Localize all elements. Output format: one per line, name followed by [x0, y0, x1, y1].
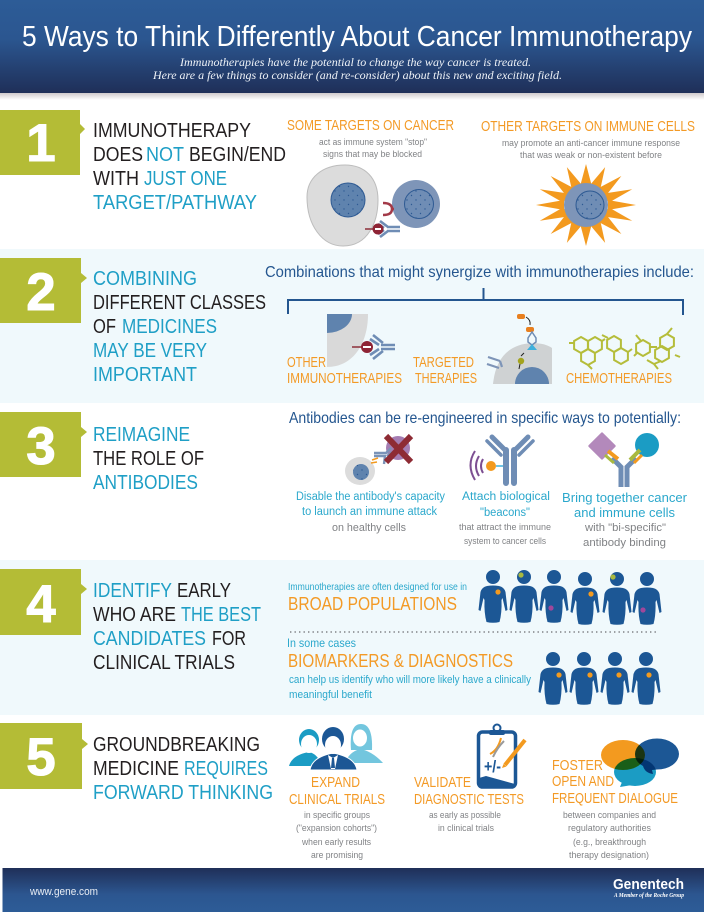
footer [2, 868, 704, 912]
heading 4: CLINICAL TRIALS [93, 652, 235, 674]
heading 2: DIFFERENT CLASSES [93, 292, 266, 314]
text: foster open dialogue [552, 758, 678, 861]
text: some targets on cancer: signs that may be blocked [323, 149, 422, 160]
heading 1: DOES [93, 144, 143, 166]
text: expand clinical trials: ("expansion cohorts") [296, 823, 377, 834]
text: attach biological beacons: Attach biological [462, 491, 550, 503]
number badge 2: 2 [26, 263, 56, 322]
heading 5 [93, 734, 273, 804]
text: foster open dialogue: between companies and [563, 810, 656, 821]
icon: targeted therapy [487, 314, 552, 384]
text: bring together [562, 490, 688, 549]
people: selected population [538, 652, 660, 705]
icon: activated immune cell [536, 164, 636, 246]
icon: clipboard with DNA and pencil [478, 724, 525, 787]
number badge 4: 4 [26, 575, 56, 634]
text: bring together: and immune cells [574, 505, 675, 520]
number badge 1 [0, 110, 85, 175]
people: broad population [478, 570, 662, 625]
panel: section 4 [0, 560, 704, 715]
bracket [288, 288, 683, 315]
heading 3: THE ROLE OF [93, 448, 204, 470]
heading 4: IDENTIFY [93, 580, 172, 602]
subtitle [152, 55, 562, 82]
text: some targets on cancer: act as immune system "stop" [319, 137, 427, 148]
text: bring together: Bring together cancer [562, 490, 688, 505]
heading 2 [93, 268, 266, 386]
text: validate diagnostic tests: DIAGNOSTIC TESTS [414, 792, 524, 808]
heading 2: IMPORTANT [93, 364, 197, 386]
heading 4: WHO ARE [93, 604, 176, 626]
heading 4: EARLY [177, 580, 231, 602]
number badge 1: 1 [26, 114, 56, 173]
label: other immunotherapies [287, 355, 402, 387]
text: foster open dialogue: therapy designation) [569, 850, 649, 861]
text: biomarkers and diagnostics [287, 636, 531, 701]
panel: section 1 [0, 110, 695, 246]
number badge 3 [0, 412, 87, 477]
text: validate diagnostic tests: as early as possible [429, 810, 501, 821]
heading 1: IMMUNOTHERAPY [93, 120, 251, 142]
heading 2: COMBINING [93, 268, 197, 290]
number badge 2 [0, 258, 87, 323]
text: foster open dialogue: FOSTER [552, 758, 603, 774]
text: expand clinical trials [289, 775, 385, 861]
number badge 3: 3 [26, 417, 56, 476]
label: other immunotherapies: OTHER [287, 355, 326, 371]
heading 4: THE BEST [181, 604, 261, 626]
text: broad populations [288, 581, 467, 614]
text: foster open dialogue: (e.g., breakthrough [573, 837, 646, 848]
heading 2: OF [93, 316, 116, 338]
logo: Genentech: Genentech [613, 876, 684, 893]
heading 5: MEDICINE [93, 758, 179, 780]
label: chemotherapies: CHEMOTHERAPIES [566, 371, 672, 387]
icon: disabled antibody [345, 436, 411, 485]
label: targeted therapies: TARGETED [413, 355, 474, 371]
text: bring together: antibody binding [583, 537, 666, 549]
text: some targets on cancer [287, 117, 454, 160]
icon: chemotherapy molecules [569, 328, 680, 369]
number badge 4 [0, 569, 87, 635]
text: biomarkers and diagnostics: In some cases [287, 636, 356, 650]
text: expand clinical trials: when early results [301, 837, 371, 848]
heading 1: NOT [146, 144, 184, 166]
text: broad populations: Immunotherapies are often designed for use in [288, 581, 467, 593]
text: biomarkers and diagnostics: BIOMARKERS & DIAGNOSTICS [288, 651, 513, 671]
website: www.gene.com [29, 886, 98, 898]
text: broad populations: BROAD POPULATIONS [288, 594, 457, 614]
text: disable the antibody: on healthy cells [332, 522, 406, 534]
heading 1 [93, 120, 286, 214]
text: biomarkers and diagnostics: meaningful benefit [289, 689, 372, 701]
icon: bi-specific antibody [588, 432, 659, 487]
panel: section 2 [0, 249, 704, 403]
icon: cancer cell with blocked checkpoint [307, 165, 440, 246]
label: targeted therapies: THERAPIES [415, 371, 477, 387]
text: disable the antibody: to launch an immune attack [302, 506, 437, 518]
heading 5: REQUIRES [184, 758, 268, 780]
text: attach biological beacons: that attract the immune [459, 522, 551, 533]
text: bring together: with "bi-specific" [584, 522, 666, 534]
text: foster open dialogue: OPEN AND [552, 774, 614, 790]
text: validate diagnostic tests: in clinical trials [438, 823, 494, 834]
icon: antibody with beacon [470, 437, 533, 483]
header banner [0, 0, 704, 100]
logo: Genentech: A Member of the Roche Group [613, 892, 685, 899]
subtitle: Immunotherapies have the potential to change the way cancer is treated. [179, 55, 531, 69]
label: other immunotherapies: IMMUNOTHERAPIES [287, 371, 402, 387]
heading 1: TARGET/PATHWAY [93, 192, 257, 214]
heading 1: BEGIN/END [189, 144, 286, 166]
text: biomarkers and diagnostics: can help us identify who will more likely have a clinically [289, 674, 531, 686]
heading 5: FORWARD THINKING [93, 782, 273, 804]
subtitle: Here are a few things to consider (and re-consider) about this new and exciting field. [152, 68, 562, 82]
heading 4 [93, 580, 261, 674]
heading 2: MAY BE VERY [93, 340, 207, 362]
text: attach biological beacons: system to cancer cells [464, 536, 546, 547]
text: other targets on immune cells: that was weak or non-existent before [520, 150, 662, 161]
icon: group of people [289, 724, 383, 770]
icon: clipboard with DNA and pencil: +/- [484, 757, 501, 776]
logo: Genentech [613, 876, 685, 899]
text: expand clinical trials: in specific groups [304, 810, 370, 821]
heading 1: JUST ONE [144, 168, 227, 190]
panel: section 3 [0, 410, 688, 549]
number badge 5 [0, 723, 88, 789]
text: attach biological beacons: "beacons" [480, 507, 530, 519]
text: other targets on immune cells: may promote an anti-cancer immune response [502, 138, 680, 149]
heading 3 [93, 424, 204, 494]
text: expand clinical trials: EXPAND [311, 775, 360, 791]
heading 5: GROUNDBREAKING [93, 734, 260, 756]
label: targeted therapies [413, 355, 477, 387]
heading 3: REIMAGINE [93, 424, 190, 446]
text: expand clinical trials: are promising [311, 850, 363, 861]
panel: section 5 [0, 723, 679, 861]
text: foster open dialogue: regulatory authorities [568, 823, 651, 834]
number badge 5: 5 [26, 728, 56, 787]
heading 2: MEDICINES [122, 316, 217, 338]
heading 1: WITH [93, 168, 139, 190]
text: other targets on immune cells [481, 118, 695, 161]
text: disable the antibody [296, 491, 445, 534]
text: some targets on cancer: SOME TARGETS ON CANCER [287, 117, 454, 134]
icon: other immunotherapies [327, 314, 395, 367]
text: disable the antibody: Disable the antibody's capacity [296, 491, 445, 503]
text: validate diagnostic tests: VALIDATE [414, 775, 471, 791]
heading 4: FOR [212, 628, 246, 650]
icon: speech bubbles [601, 738, 679, 787]
heading 3: ANTIBODIES [93, 472, 198, 494]
text: validate diagnostic tests [414, 775, 524, 834]
text: expand clinical trials: CLINICAL TRIALS [289, 792, 385, 808]
heading 4: CANDIDATES [93, 628, 206, 650]
text: attach biological beacons [459, 491, 551, 547]
